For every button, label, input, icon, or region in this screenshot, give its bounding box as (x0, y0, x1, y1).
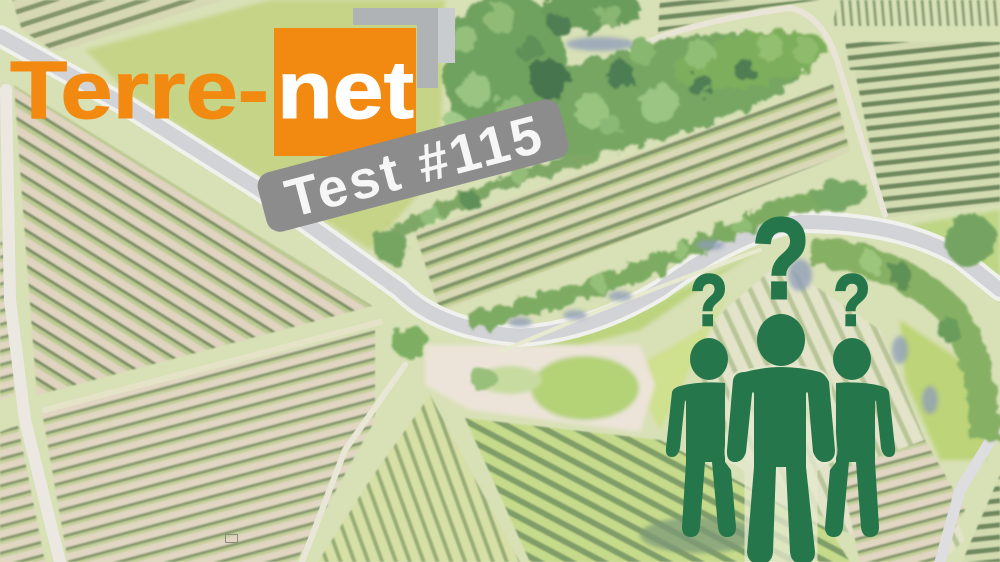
logo: Terre-net (10, 8, 455, 156)
trees and hedges (375, 0, 996, 440)
logo word Terre-: Terre- (10, 45, 269, 136)
tree shadows (508, 37, 938, 553)
logo grey corner (353, 8, 438, 88)
small placeholder rectangle (226, 534, 238, 542)
light grass plots (85, 0, 1000, 460)
person left (666, 338, 736, 537)
badge: Test #115: Test #115 (279, 104, 548, 229)
icon: three people with question marks (666, 195, 895, 562)
person centre halo (727, 367, 835, 562)
question mark left: ? (691, 261, 727, 341)
logo light grey bar (438, 8, 455, 63)
question mark right: ? (834, 261, 870, 341)
person right (825, 338, 895, 537)
logo word net: net (277, 45, 414, 136)
person centre (727, 314, 835, 562)
logo orange square (274, 28, 416, 156)
question mark centre: ? (752, 195, 810, 323)
